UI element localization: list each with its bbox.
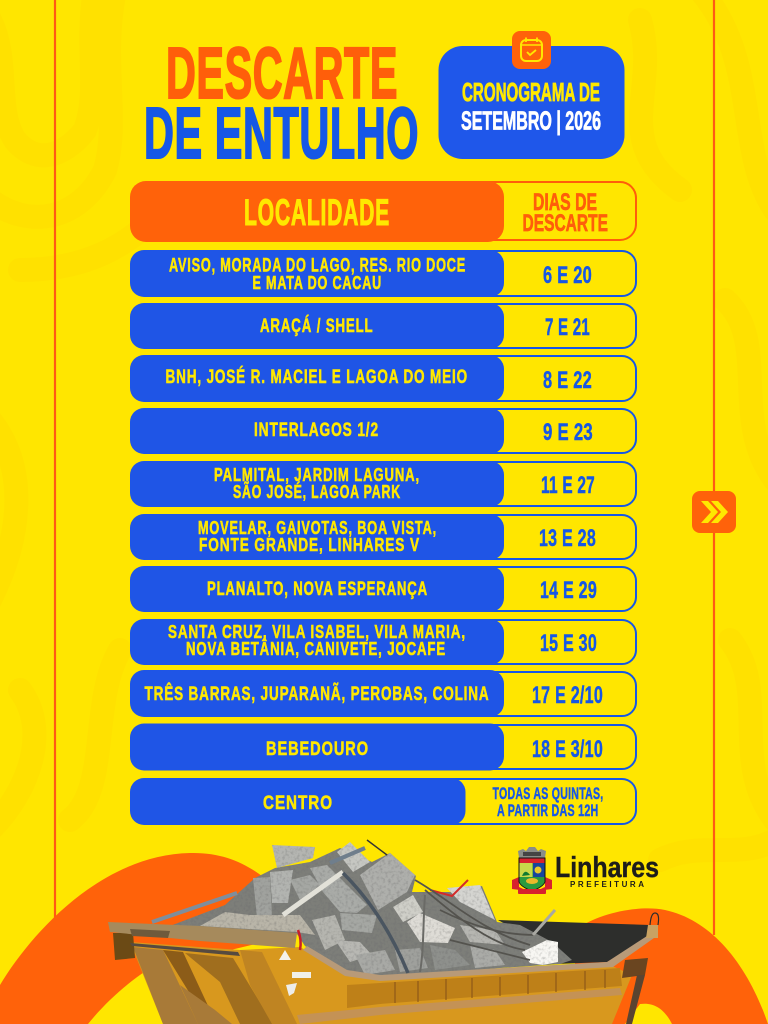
row: Araçá [130,303,636,349]
row: Aviso: 6 E 20 [543,262,592,289]
rebar and rails [152,840,555,973]
row: Movelar [130,514,636,560]
row: Aviso [130,250,636,297]
rubble [170,842,572,978]
arrow button [692,491,736,533]
row: Santa Cruz [130,619,636,665]
icon: calendar [512,31,551,69]
title: DESCARTE [166,34,398,114]
row: Aviso: E MATA DO CACAU [252,273,382,293]
row: Três Barras: 17 E 2/10 [532,682,603,709]
row: BNH [130,355,636,402]
logo: Linhares: Linhares [555,852,659,884]
row: Interlagos [130,408,636,454]
row: Planalto: PLANALTO, NOVA ESPERANÇA [207,579,428,600]
row: Aviso: AVISO, MORADA DO LAGO, RES. RIO DOCE [169,256,466,276]
badge text: CRONOGRAMA DE [462,77,600,107]
logo: Linhares [512,847,659,894]
row: Santa Cruz: NOVA BETÂNIA, CANIVETE, JOCAFE [186,638,446,659]
dumpster with rubble [108,840,659,1024]
row: Palmital [130,461,636,507]
row: Centro [130,778,636,825]
table header: DESCARTE [522,210,608,237]
row: Bebedouro: BEBEDOURO [266,739,369,760]
orange arc left [0,853,272,1024]
row: Centro: TODAS AS QUINTAS, [492,785,604,803]
row: Três Barras [130,670,636,717]
row: Centro: A PARTIR DAS 12H [497,802,598,820]
dumpster back wall [498,920,650,964]
row: Bebedouro: 18 E 3/10 [532,736,603,763]
row: Movelar: FONTE GRANDE, LINHARES V [199,535,420,555]
row: Três Barras: TRÊS BARRAS, JUPARANÃ, PEROBAS, COLINA [144,683,490,705]
row: Interlagos: 9 E 23 [543,419,593,446]
row: Bebedouro [130,724,636,770]
row: Movelar: 13 E 28 [539,525,596,552]
row: Planalto [130,566,636,612]
schedule badge [438,31,624,159]
row: Centro: CENTRO [263,793,333,814]
table header: DIAS DE [533,189,597,216]
row: Santa Cruz: SANTA CRUZ, VILA ISABEL, VILA MARIA, [168,622,466,642]
logo: Linhares: PREFEITURA [570,880,644,889]
badge text [461,77,601,136]
row: Santa Cruz: 15 E 30 [540,630,597,657]
badge text: SETEMBRO | 2026 [461,106,601,136]
icon: coat of arms [512,847,552,894]
dumpster body [108,913,659,1024]
title [144,34,419,174]
row: Palmital: 11 E 27 [541,472,595,499]
row: Araçá: 7 E 21 [545,314,590,341]
row: Movelar: MOVELAR, GAIVOTAS, BOA VISTA, [198,518,437,538]
row: BNH: BNH, JOSÉ R. MACIEL E LAGOA DO MEIO [166,366,468,388]
row: Palmital: SÃO JOSÉ, LAGOA PARK [233,481,401,502]
row: Araçá: ARAÇÁ / SHELL [260,315,374,337]
row: Palmital: PALMITAL, JARDIM LAGUNA, [214,465,420,485]
orange arc right [575,908,768,1024]
schedule table [130,181,636,825]
row: Interlagos: INTERLAGOS 1/2 [254,420,379,441]
table header: LOCALIDADE [244,192,390,233]
row: Planalto: 14 E 29 [540,577,597,604]
title: DE ENTULHO [144,94,419,174]
frame lines [55,0,714,935]
row: BNH: 8 E 22 [543,367,592,394]
table header [130,181,636,242]
